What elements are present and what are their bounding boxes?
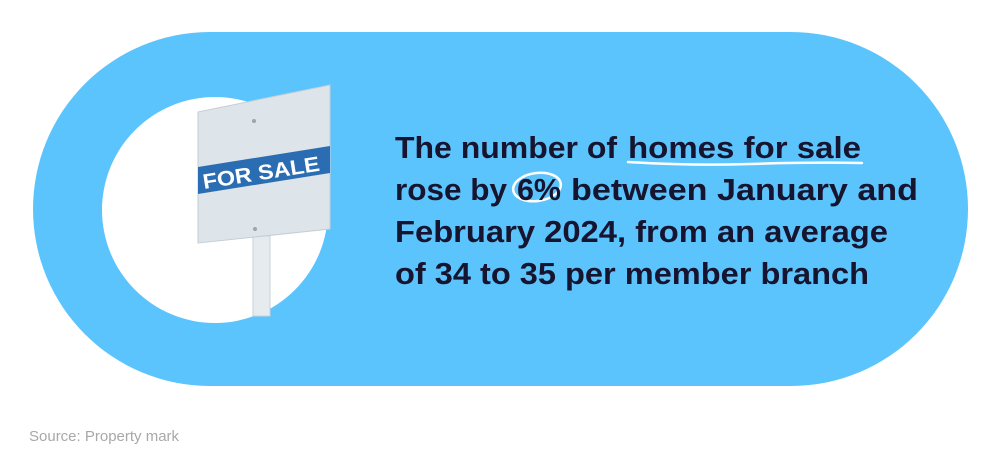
source note: Source: Property mark [29, 428, 180, 445]
text block: main statistic: The number of [395, 130, 618, 165]
icon: for sale sign: FOR SALE [201, 153, 321, 194]
white circle [102, 97, 328, 323]
icon: for sale sign [198, 85, 330, 316]
text block: main statistic: February 2024, from an average [395, 214, 888, 249]
highlight: circle around 6% [511, 170, 563, 204]
text block: main statistic: rose by [395, 172, 508, 207]
text block: main statistic: 6% [517, 172, 561, 207]
highlight: underline under homes for sale [628, 162, 862, 165]
text block: main statistic: of 34 to 35 per member branch [395, 256, 869, 291]
panel: blue pill background [33, 32, 968, 386]
text block: main statistic [395, 130, 918, 291]
text block: main statistic: homes for sale [628, 130, 861, 165]
text block: main statistic: between January and [571, 172, 918, 207]
